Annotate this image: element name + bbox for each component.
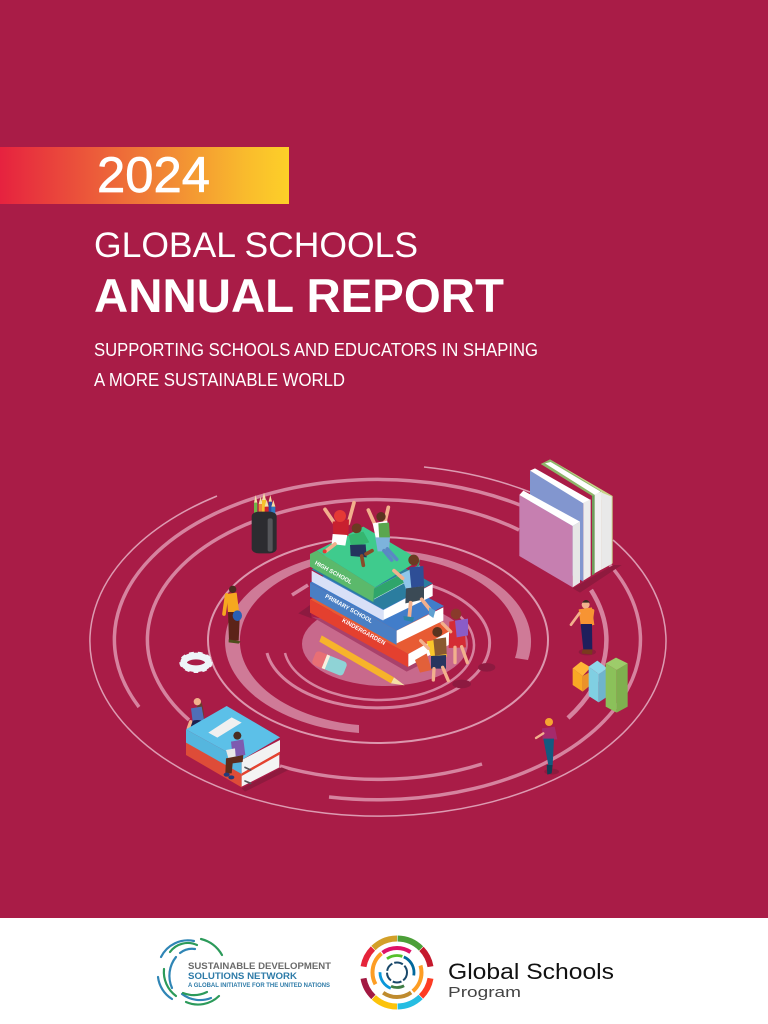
man in yellow top — [224, 586, 242, 644]
kindergarten book — [310, 577, 452, 667]
pencil cup — [252, 493, 277, 553]
child with green backpack — [368, 507, 397, 560]
child with blue backpack — [394, 555, 435, 622]
logo wordmark — [448, 959, 614, 1001]
cyan book pile — [186, 706, 288, 792]
title: ANNUAL REPORT — [94, 269, 504, 322]
high school book: HIGH SCHOOL — [313, 561, 353, 586]
SDSN wordmark: SOLUTIONS NETWORK — [188, 971, 297, 982]
gear — [181, 653, 211, 672]
SDSN wordmark — [188, 961, 331, 989]
subtitle: A MORE SUSTAINABLE WORLD — [94, 370, 345, 390]
left side objects — [181, 493, 288, 792]
title — [94, 226, 504, 322]
open page markers — [415, 653, 432, 673]
year banner — [0, 147, 289, 204]
footer band — [0, 918, 768, 1024]
child in green jumping — [349, 523, 372, 565]
high school book — [310, 527, 420, 602]
subtitle — [94, 340, 538, 390]
pencil — [319, 635, 405, 685]
primary school book: PRIMARY SCHOOL — [324, 594, 374, 625]
logo rings — [363, 938, 431, 1006]
SDSN logo — [158, 939, 331, 1005]
title: GLOBAL SCHOOLS — [94, 226, 418, 265]
primary school book — [310, 560, 444, 645]
eraser — [311, 650, 348, 676]
upright books — [519, 459, 613, 587]
central book stack with children — [298, 503, 495, 688]
kindergarten book: KINDERGARDEN — [341, 618, 386, 647]
concentric ring illustration — [90, 467, 666, 816]
middle book — [312, 543, 433, 621]
year banner: 2024 — [97, 147, 210, 203]
logo wordmark: Program — [448, 985, 521, 1001]
man in orange shirt — [571, 600, 596, 655]
child in yellow — [421, 627, 448, 681]
logo wordmark: Global Schools — [448, 959, 614, 984]
woman seated on book — [188, 697, 205, 728]
child in red dress — [442, 609, 468, 663]
man with laptop — [224, 732, 245, 779]
Global Schools Program logo — [363, 938, 614, 1006]
SDSN logo mark — [158, 939, 222, 1005]
subtitle: SUPPORTING SCHOOLS AND EDUCATORS IN SHAPING — [94, 340, 538, 360]
SDSN wordmark: SUSTAINABLE DEVELOPMENT — [188, 961, 331, 972]
woman in magenta top — [536, 718, 559, 775]
bar blocks — [573, 658, 628, 713]
right side objects — [519, 459, 628, 775]
SDSN wordmark: A GLOBAL INITIATIVE FOR THE UNITED NATIONS — [188, 982, 331, 989]
child in red jumping — [323, 503, 354, 553]
